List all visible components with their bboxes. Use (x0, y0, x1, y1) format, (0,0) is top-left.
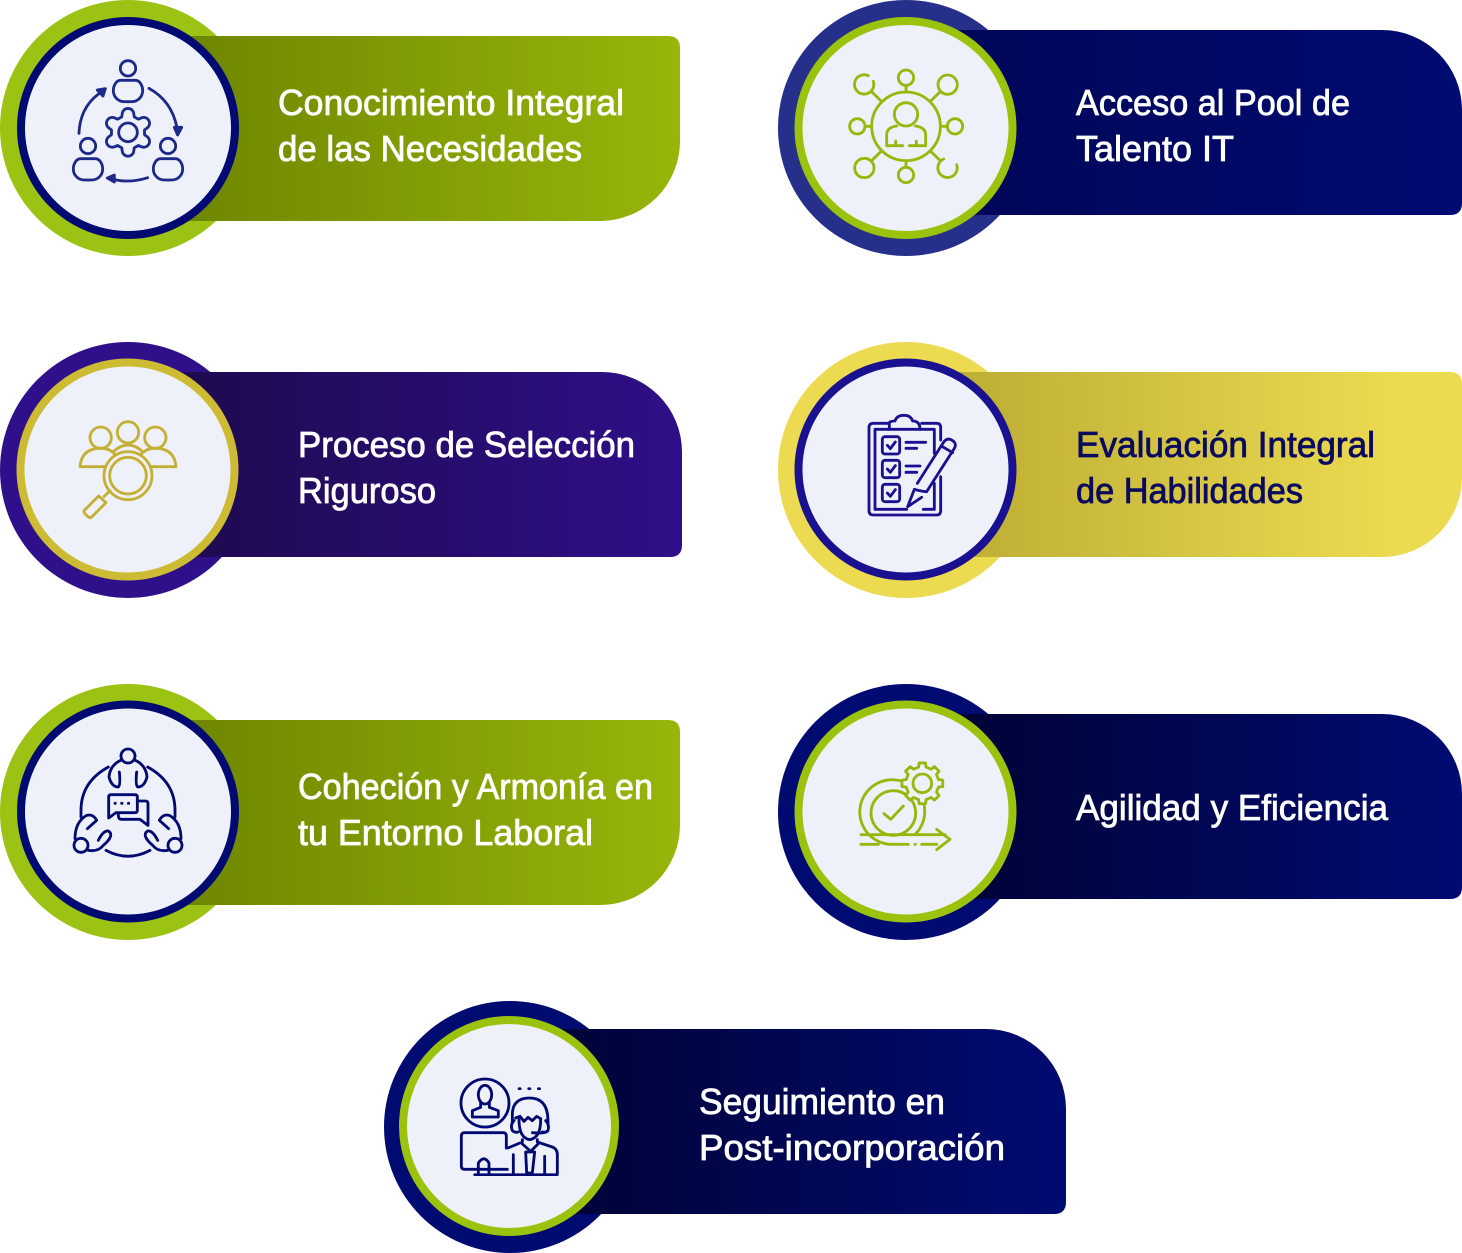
banner (128, 720, 680, 905)
panel: Seguimiento en Post-incorporación (384, 1001, 1066, 1253)
label: Riguroso (298, 470, 436, 511)
icon: talent network (850, 70, 963, 183)
label: de las Necesidades (278, 128, 582, 169)
panel: Evaluación Integral de Habilidades (778, 342, 1462, 598)
label (1076, 82, 1350, 169)
outer circle (384, 1001, 636, 1253)
outer circle (778, 0, 1034, 256)
label: Proceso de Selección (298, 424, 635, 465)
panel: Acceso al Pool de Talento IT (778, 0, 1462, 256)
label (1076, 424, 1375, 511)
icon: clipboard checklist (869, 415, 955, 515)
inner ring (21, 21, 235, 235)
banner (510, 1029, 1066, 1214)
inner ring (798, 21, 1012, 235)
outer circle (0, 684, 256, 940)
panel: Cohesión y Armonía en tu Entorno Laboral (0, 684, 680, 940)
label: Seguimiento en (699, 1081, 945, 1122)
label (699, 1081, 1005, 1168)
label: Coheción y Armonía en (298, 766, 653, 807)
outer circle (0, 0, 256, 256)
label (298, 766, 653, 853)
banner (906, 714, 1462, 899)
inner ring (21, 704, 235, 918)
label: Agilidad y Eficiencia (1076, 787, 1389, 828)
label: Post-incorporación (699, 1127, 1005, 1168)
label (298, 424, 635, 511)
banner (128, 36, 680, 221)
label: Acceso al Pool de (1076, 82, 1350, 123)
icon: candidates under magnifier (80, 422, 176, 518)
banner (906, 372, 1462, 557)
banner (906, 30, 1462, 215)
outer circle (778, 342, 1034, 598)
label (278, 82, 624, 169)
icon: team conversation (74, 749, 182, 856)
label: de Habilidades (1076, 470, 1303, 511)
label: Conocimiento Integral (278, 82, 624, 123)
panel: Conocimiento Integral de las Necesidades (0, 0, 680, 256)
banner (128, 372, 682, 557)
icon: agile cycle with gear (860, 763, 950, 850)
icon: recruiter with headset at computer (461, 1079, 557, 1175)
panel: Proceso de Selección Riguroso (0, 342, 682, 598)
inner ring (798, 704, 1012, 918)
inner ring (403, 1020, 615, 1232)
panel: Agilidad y Eficiencia (778, 684, 1462, 940)
inner ring (20, 362, 234, 576)
label: Evaluación Integral (1076, 424, 1375, 465)
icon: people around gear (73, 61, 183, 182)
label: tu Entorno Laboral (298, 812, 593, 853)
outer circle (778, 684, 1034, 940)
label: Talento IT (1076, 128, 1234, 169)
outer circle (0, 342, 256, 598)
inner ring (798, 362, 1012, 576)
